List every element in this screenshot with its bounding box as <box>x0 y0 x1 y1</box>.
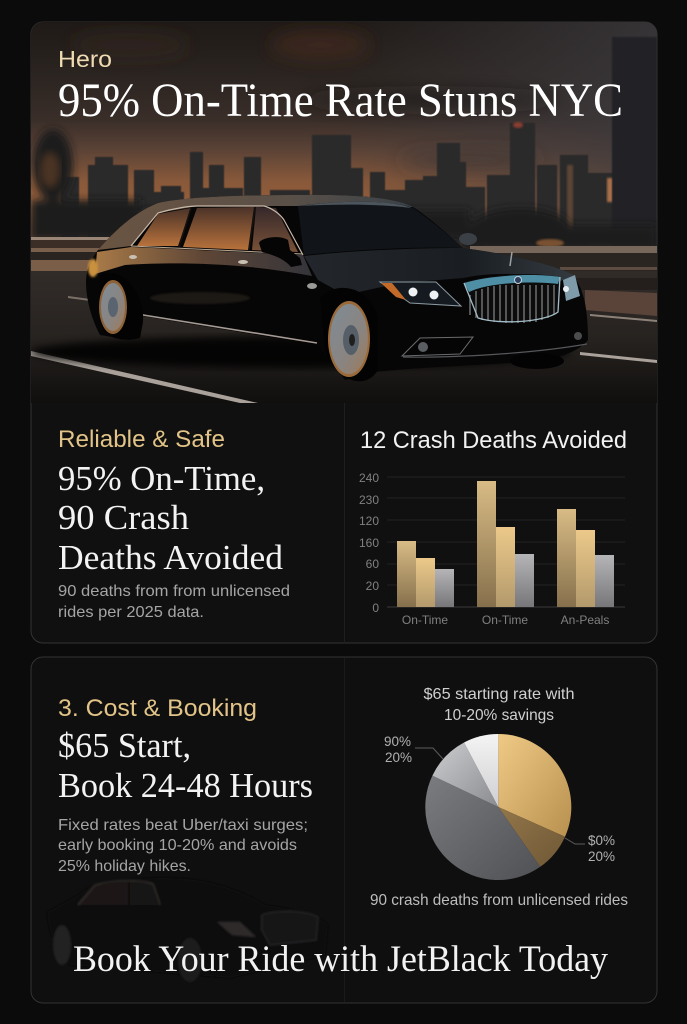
pie label left <box>384 734 443 765</box>
y axis labels: 120 <box>359 514 379 528</box>
y axis labels: 230 <box>359 493 379 507</box>
bar group 2 <box>477 481 534 607</box>
y axis labels: 60 <box>366 557 379 571</box>
pie label right <box>565 833 615 864</box>
section heading: 95% On-Time, <box>58 459 265 498</box>
hero eyebrow: Hero <box>58 46 112 72</box>
hero headline: 95% On-Time Rate Stuns NYC <box>58 74 623 127</box>
bar chart <box>359 471 625 627</box>
roof band <box>98 195 413 250</box>
panel: bottom card <box>31 657 657 1003</box>
section: reliable and safe text <box>58 426 290 621</box>
x axis labels <box>402 613 609 627</box>
section body: 25% holiday hikes. <box>58 858 191 875</box>
rear wheel <box>99 273 143 340</box>
pie chart title: $65 starting rate with <box>424 686 574 703</box>
car windows <box>131 206 303 267</box>
section body: early booking 10-20% and avoids <box>58 837 297 854</box>
section label: 3. Cost & Booking <box>58 695 257 722</box>
pie chart <box>384 734 615 880</box>
windshield <box>298 202 463 255</box>
y axis labels: 0 <box>372 601 379 615</box>
pie label right: $0% <box>588 833 615 848</box>
limousine car <box>30 195 588 381</box>
section heading: Deaths Avoided <box>58 538 283 577</box>
bar group 3 <box>557 509 614 607</box>
skyline <box>61 123 614 247</box>
side body reflection <box>95 247 312 276</box>
x axis labels: On-Time <box>402 613 448 627</box>
section heading: Book 24-48 Hours <box>58 766 313 805</box>
car silhouette <box>86 195 588 380</box>
section heading: 90 Crash <box>58 498 190 537</box>
lower intake <box>402 332 587 357</box>
pie chart title: 10-20% savings <box>444 707 554 724</box>
x axis labels: On-Time <box>482 613 528 627</box>
headlights <box>380 275 580 306</box>
pie label left: 20% <box>385 750 412 765</box>
chart title: 12 Crash Deaths Avoided <box>360 427 627 454</box>
y axis labels <box>359 471 379 615</box>
call to action: Book Your Ride with JetBlack Today <box>73 939 608 980</box>
y axis labels: 240 <box>359 471 379 485</box>
section body: rides per 2025 data. <box>58 604 204 621</box>
x axis labels: An-Peals <box>561 613 609 627</box>
front tyre right <box>511 356 564 369</box>
pie label left: 90% <box>384 734 411 749</box>
section label: Reliable & Safe <box>58 426 225 453</box>
front grille <box>463 274 560 323</box>
pie label right: 20% <box>588 849 615 864</box>
side sill and handles <box>137 314 317 343</box>
section body: 90 deaths from from unlicensed <box>58 583 290 600</box>
pie chart caption: 90 crash deaths from unlicensed rides <box>370 892 628 909</box>
front wheel <box>328 288 376 382</box>
section heading: $65 Start, <box>58 726 191 765</box>
y axis labels: 20 <box>366 579 379 593</box>
faded limousine background <box>47 878 328 982</box>
hero photo: limousine at dusk <box>30 22 657 403</box>
highway railing <box>31 237 657 271</box>
hood and fender <box>304 248 575 295</box>
panel: top card <box>30 22 657 643</box>
y axis labels: 160 <box>359 536 379 550</box>
section: cost and booking text <box>58 695 313 875</box>
bar group 1 <box>397 541 454 607</box>
section body: Fixed rates beat Uber/taxi surges; <box>58 817 308 834</box>
